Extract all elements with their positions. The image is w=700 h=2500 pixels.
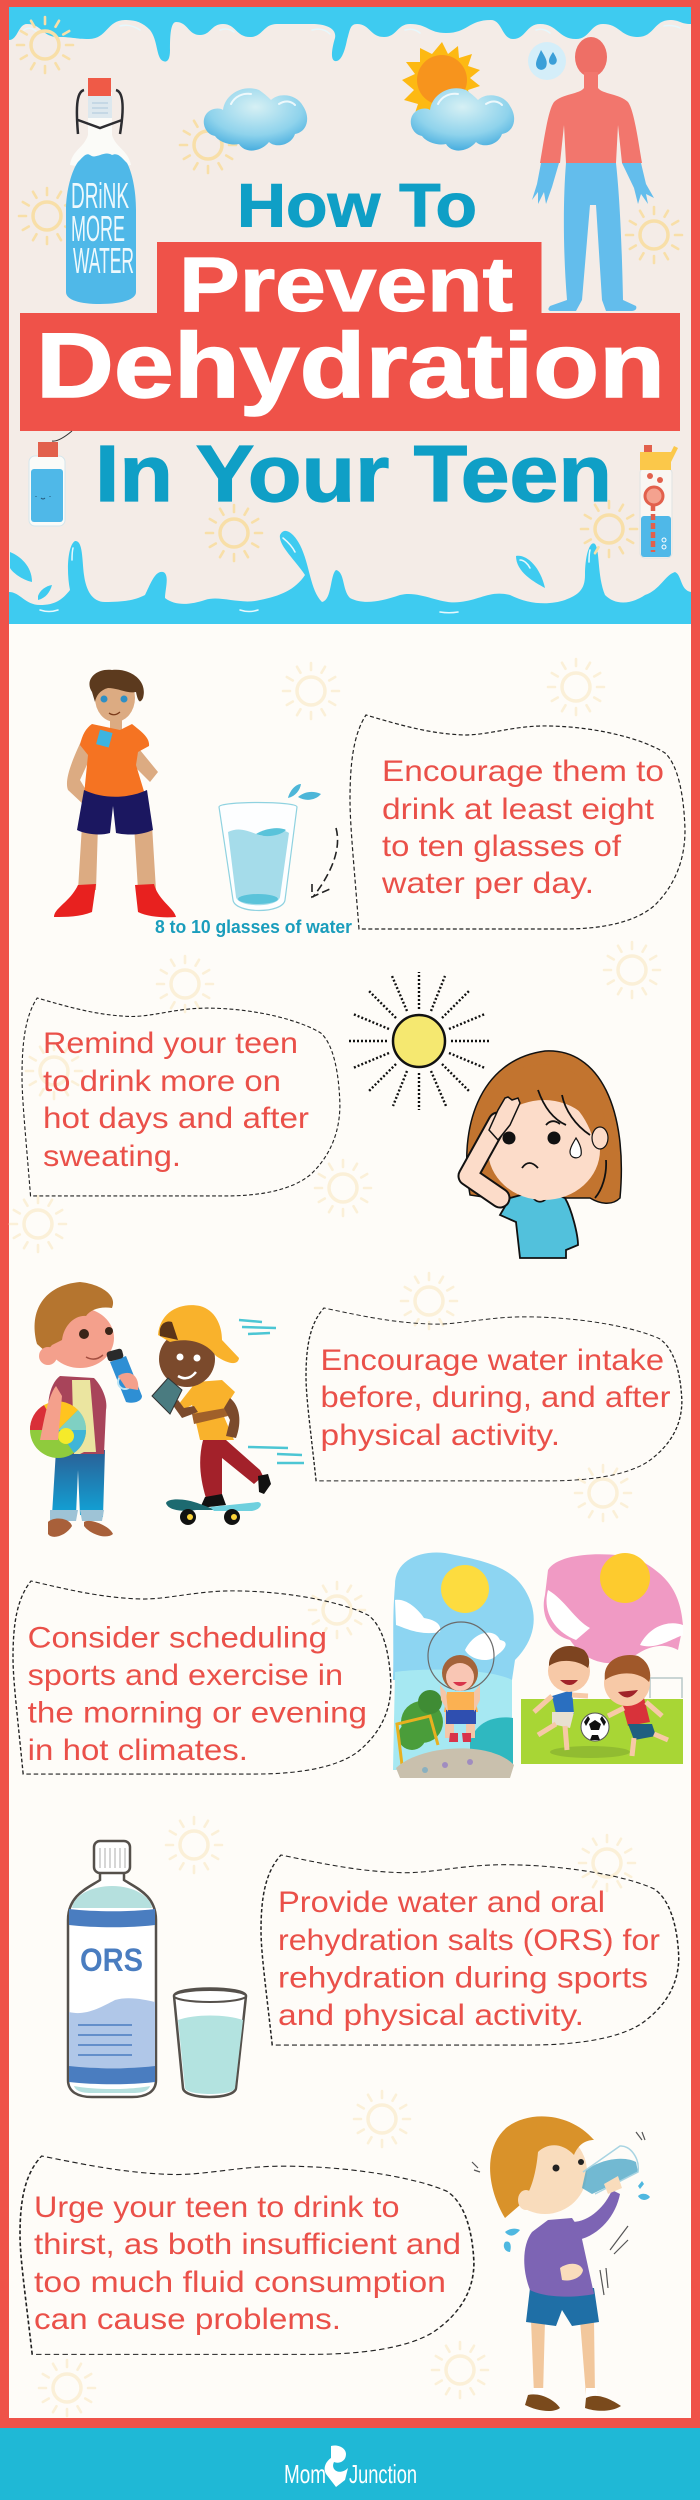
callout: physical activity <box>306 1308 682 1481</box>
callout: ORS: rehydration during sports <box>278 1962 648 1995</box>
tip 1: boy with glass of water <box>54 670 685 937</box>
callout: drink to thirst: Urge your teen to drink to <box>34 2191 399 2224</box>
callout: drink to thirst: thirst, as both insufficient and <box>34 2228 461 2261</box>
callout: hot days: sweating. <box>43 1140 181 1173</box>
tip 3: boys drinking during activity <box>30 1282 682 1537</box>
callout: drink to thirst <box>20 2156 474 2354</box>
glasses caption: 8 to 10 glasses of water <box>155 917 352 937</box>
scene: boys playing football <box>521 1553 683 1764</box>
icon: drink more water bottle <box>66 78 136 304</box>
tip 5: ORS <box>68 1841 679 2097</box>
callout: ORS: and physical activity. <box>278 1999 584 2032</box>
callout: physical activity: physical activity. <box>320 1419 560 1452</box>
icon: small smiling bottle <box>29 431 72 526</box>
callout: morning or evening <box>13 1581 391 1774</box>
callout: eight to ten glasses <box>350 715 685 929</box>
tip 2: girl under hot sun <box>22 972 621 1258</box>
callout: drink to thirst: can cause problems. <box>34 2303 341 2336</box>
icon: cloud left <box>204 88 307 151</box>
callout: eight to ten glasses: drink at least eight <box>382 793 654 826</box>
bottle lettering: DRiNK <box>71 175 129 216</box>
boy drinking <box>54 670 176 917</box>
callout: morning or evening: in hot climates. <box>28 1734 248 1767</box>
logo wordmark: Junction <box>349 2459 417 2489</box>
callout: eight to ten glasses: water per day. <box>381 867 594 900</box>
tip 4: scheduling exercise <box>13 1552 683 1778</box>
footer logo <box>284 2445 417 2489</box>
panel: header <box>9 7 691 624</box>
logo wordmark: Mom <box>284 2459 326 2489</box>
callout: eight to ten glasses: to ten glasses of <box>382 830 622 863</box>
callout: hot days: to drink more on <box>43 1065 281 1098</box>
callout: hot days: Remind your teen <box>43 1027 298 1060</box>
water drips: top <box>9 7 691 62</box>
header sun motifs <box>17 17 682 561</box>
icon: fruit infuser bottle <box>640 445 678 558</box>
title: Dehydration banner: Dehydration <box>36 315 665 417</box>
callout: physical activity: before, during, and after <box>320 1381 671 1414</box>
icon: ORS bottle: ORS <box>80 1942 143 1978</box>
callout: morning or evening: Consider scheduling <box>28 1622 327 1654</box>
girl holding forehead <box>467 1051 621 1258</box>
boy on skateboard <box>152 1305 271 1525</box>
tip 6: drink to thirst <box>20 2116 650 2411</box>
callout: morning or evening: sports and exercise in <box>28 1659 343 1692</box>
callout: ORS: Provide water and oral <box>278 1886 605 1919</box>
water splash: bottom <box>9 531 691 624</box>
icon: sun behind cloud <box>402 42 514 151</box>
boy drinking from glass <box>472 2116 650 2411</box>
title: How To: How To <box>237 172 477 240</box>
background sun motifs <box>10 659 660 2416</box>
icon: ORS bottle <box>68 1841 156 2097</box>
footer <box>0 2428 700 2500</box>
icon: hydrated body figure <box>528 37 654 311</box>
callout: ORS: rehydration salts (ORS) for <box>278 1924 660 1957</box>
bottle lettering <box>71 175 134 281</box>
callout: hot days: hot days and after <box>43 1102 309 1135</box>
title: Prevent banner: Prevent <box>179 242 513 328</box>
icon: drink more water bottle: WATER <box>73 240 134 281</box>
callout: drink to thirst: too much fluid consumption <box>34 2266 446 2299</box>
icon: glass of water <box>174 1988 246 2097</box>
icon: dotted sun <box>348 972 490 1110</box>
speed lines <box>239 1320 304 1463</box>
callout: eight to ten glasses: Encourage them to <box>382 755 664 788</box>
callout: morning or evening: the morning or evening <box>28 1697 367 1730</box>
glass of water <box>219 784 321 910</box>
callout: hot days <box>22 998 340 1196</box>
callout: ORS <box>261 1855 679 2045</box>
scene: girl skipping rope <box>393 1552 534 1778</box>
boy with ball and bottle <box>30 1282 142 1537</box>
dashed arrow <box>312 828 338 897</box>
callout: physical activity: Encourage water intake <box>320 1344 664 1377</box>
title: In Your Teen: In Your Teen <box>95 429 612 518</box>
bottle lettering: MORE <box>71 208 125 249</box>
logo wordmark <box>284 2459 417 2489</box>
